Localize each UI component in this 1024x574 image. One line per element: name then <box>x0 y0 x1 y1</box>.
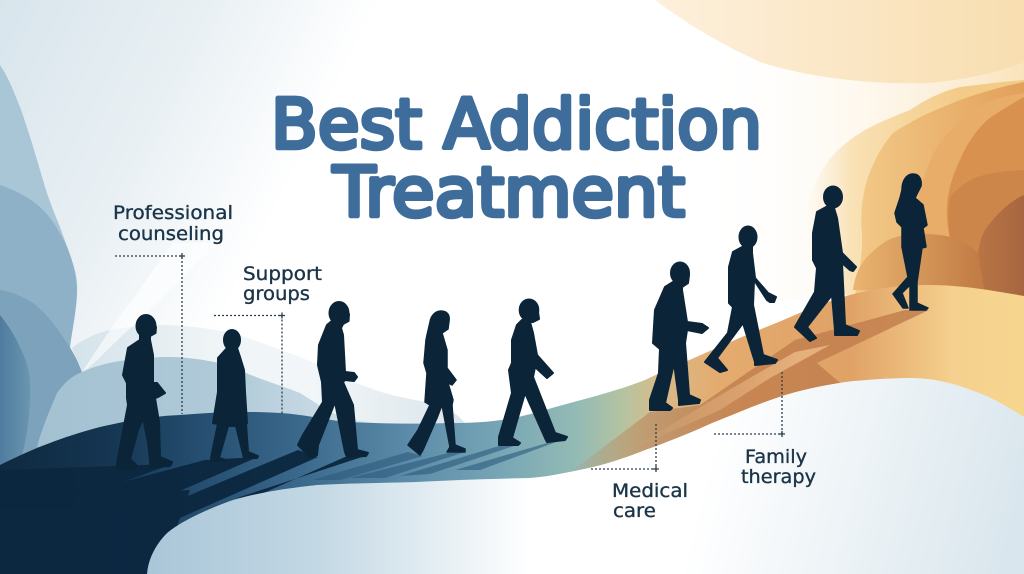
label: support groups <box>243 263 322 305</box>
walking figure 5 <box>499 300 567 445</box>
connector: support groups <box>214 312 285 414</box>
title <box>271 85 762 233</box>
walking figure 3 <box>298 302 368 457</box>
connector: medical care <box>589 424 659 472</box>
label: professional counseling: Professional <box>113 202 233 224</box>
label: family therapy <box>741 446 816 488</box>
label: professional counseling <box>113 202 233 245</box>
walking figure 9 <box>893 174 928 310</box>
light streak <box>82 243 217 372</box>
title: Best Addiction <box>271 85 762 165</box>
right warm layered shapes <box>803 80 1024 300</box>
label: medical care: care <box>613 500 656 522</box>
walking figure 2 <box>211 330 258 461</box>
winding road <box>0 285 1024 574</box>
walking figure 6 <box>650 262 708 410</box>
top-right peach swoosh <box>655 0 1024 83</box>
back hill light <box>72 325 467 440</box>
label: medical care: Medical <box>612 480 688 502</box>
label: support groups: Support <box>243 263 322 285</box>
title: Treatment <box>332 153 685 233</box>
label: family therapy: therapy <box>741 466 816 488</box>
connector: professional counseling <box>115 253 185 414</box>
label: medical care <box>612 480 688 522</box>
road shadows: left <box>41 450 362 574</box>
walking figure 4 <box>408 311 465 455</box>
left layered blue shapes <box>0 65 97 470</box>
bottom-right pale blue field <box>640 370 1024 574</box>
bottom-left pale blob <box>120 465 530 574</box>
label: family therapy: Family <box>745 446 807 468</box>
walking figure 1 <box>117 315 172 469</box>
connector: family therapy <box>714 372 785 437</box>
walking figure 7 <box>705 226 777 372</box>
road shadows: middle <box>313 442 556 480</box>
road shadows: right <box>560 310 929 480</box>
label: professional counseling: counseling <box>118 223 224 245</box>
label: support groups: groups <box>243 283 310 305</box>
walking figure 8 <box>795 186 859 341</box>
back hill mid <box>37 357 385 447</box>
